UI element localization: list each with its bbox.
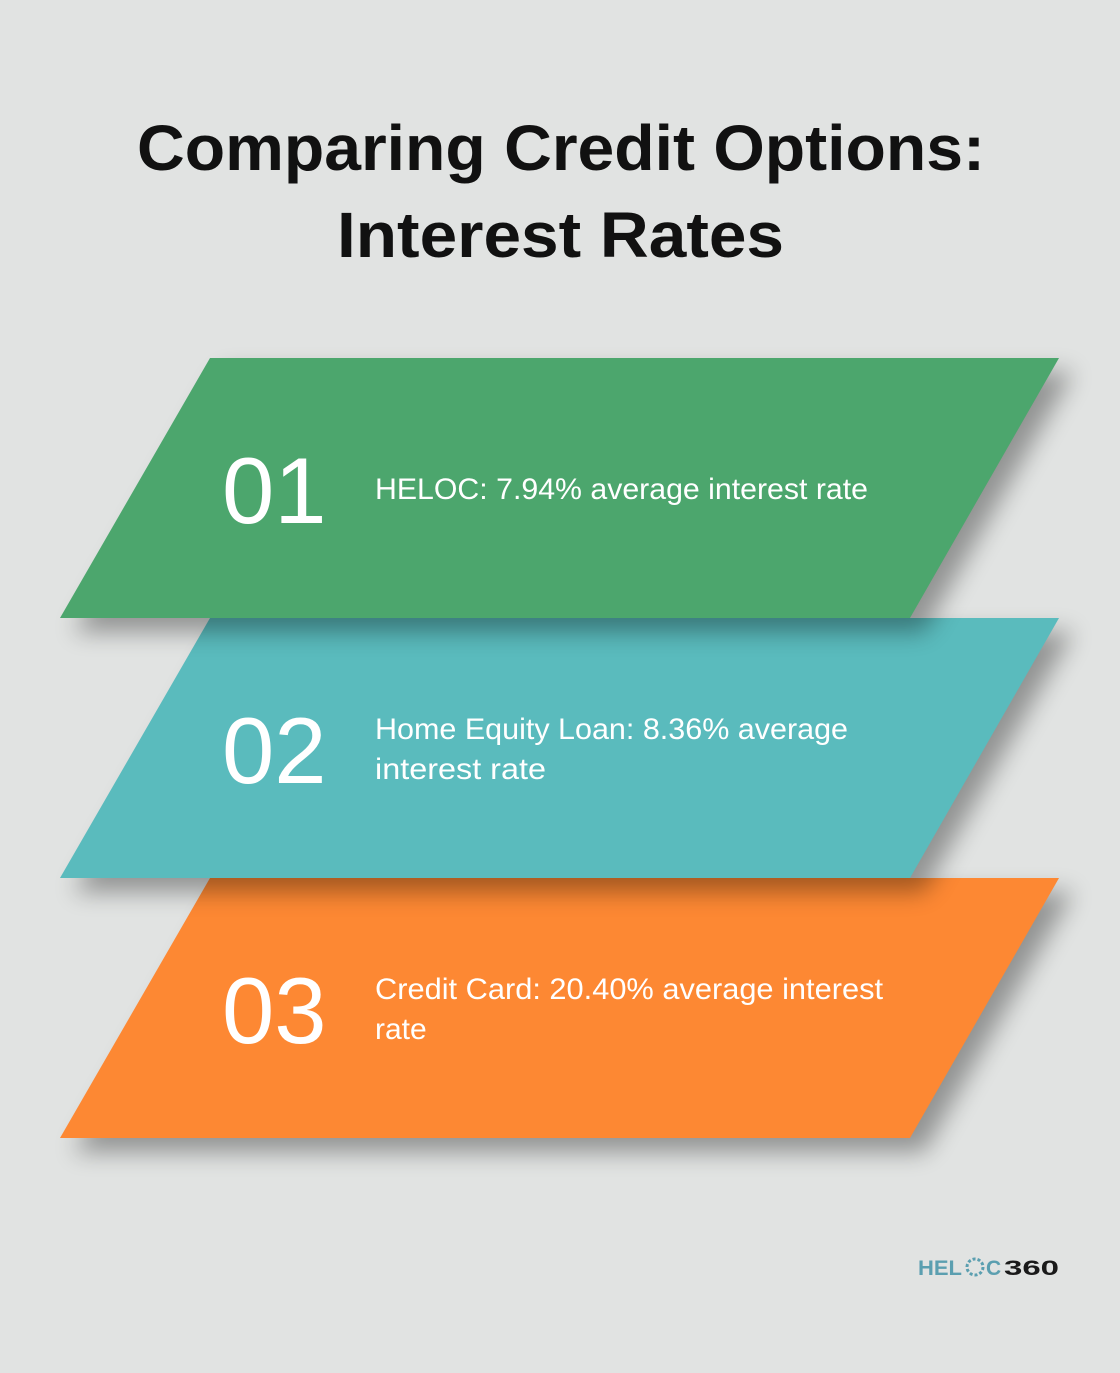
panel: 02 home equity loan [60,618,1073,892]
logo: 360 [1004,1257,1059,1280]
panel: 01 heloc: 01 [222,438,327,543]
title: Comparing Credit Options: [137,112,985,184]
logo [918,1257,1059,1280]
panel: 02 home equity loan: 02 [222,698,327,803]
panel: 02 home equity loan: Home Equity Loan: 8.36% average [375,713,848,746]
logo: HEL [918,1257,962,1280]
panel: 02 home equity loan: interest rate [375,753,546,786]
logo: C [986,1257,1001,1280]
panel: 03 credit card: rate [375,1013,427,1046]
panel: 03 credit card: Credit Card: 20.40% average interest [375,973,884,1006]
panel: 03 credit card: 03 [222,958,327,1063]
panel: 01 heloc: HELOC: 7.94% average interest rate [375,473,868,506]
title [137,112,985,271]
panel: 03 credit card [60,878,1073,1152]
title: Interest Rates [337,199,784,271]
panel: 01 heloc [60,358,1073,632]
